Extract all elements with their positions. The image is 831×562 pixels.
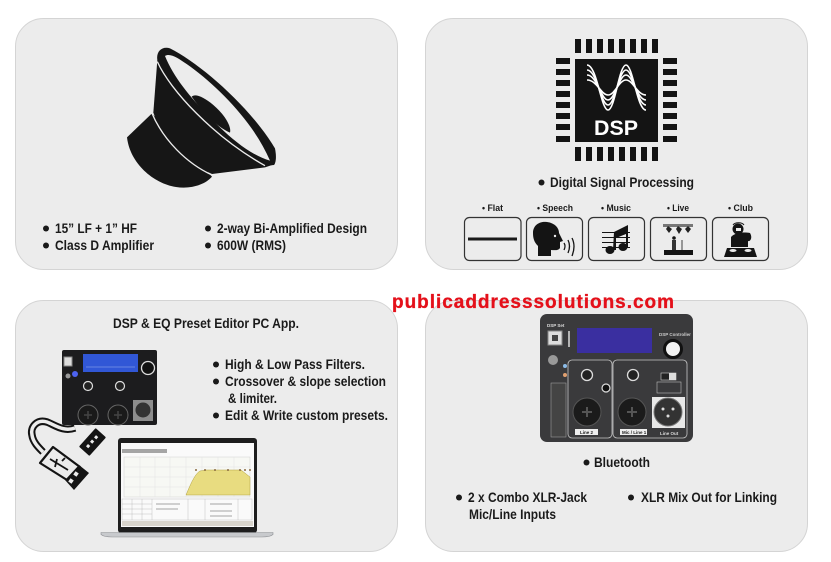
bullets: speaker features right: [205, 220, 367, 253]
EQ chart: [124, 457, 251, 497]
device: rear connector panel: Mic / Line 1: [622, 430, 647, 435]
watermark: website: publicaddresssolutions.com: [392, 292, 674, 313]
heading: Digital Signal Processing: Digital Signal Processing: [550, 174, 694, 190]
preset: Club: • Club: [728, 203, 753, 213]
panel: rear connectors: [426, 300, 808, 552]
bullets: editor features: Crossover & slope selection: [225, 373, 386, 389]
preset: Speech: [526, 203, 582, 260]
panel: DSP: [426, 18, 808, 270]
bullets: XLR mix out: XLR Mix Out for Linking: [641, 489, 777, 505]
bullets: speaker features right: 2-way Bi-Amplified Design: [217, 220, 367, 236]
bullets: speaker features left: [43, 220, 154, 253]
heading: editor title: DSP & EQ Preset Editor PC App.: [113, 315, 299, 331]
device: rear connector panel: Line Out: [660, 431, 679, 436]
bullets: inputs: Mic/Line Inputs: [469, 506, 556, 522]
device: rear connector panel: [540, 314, 693, 442]
preset: Music: • Music: [601, 203, 631, 213]
icon: loudspeaker: [127, 48, 276, 188]
preset: Flat: • Flat: [482, 203, 503, 213]
bullets: speaker features right: 600W (RMS): [217, 237, 286, 253]
panel: DSP and EQ editor: [16, 300, 398, 552]
bullets: speaker features left: Class D Amplifier: [55, 237, 154, 253]
preset: Club: [712, 203, 768, 260]
device: rear connector panel: Line 2: [580, 430, 594, 435]
bullets: editor features: [213, 356, 388, 423]
preset: Live: • Live: [667, 203, 689, 213]
device: rear connector panel: DSP Set: [547, 323, 565, 328]
device: rear connector panel: DSP Controller: [659, 332, 691, 337]
preset: Flat: [464, 203, 521, 260]
bullets: editor features: High & Low Pass Filters.: [225, 356, 365, 372]
icon: DSP chip: [556, 39, 677, 161]
bullets: speaker features left: 15” LF + 1” HF: [55, 220, 137, 236]
laptop with EQ software: [101, 438, 273, 537]
icon: USB cable and plug: [32, 421, 106, 490]
device: rear control panel: [62, 350, 157, 425]
icon: DSP chip: DSP: [594, 117, 638, 140]
bullets: inputs: [456, 489, 587, 522]
preset: Live: [650, 203, 706, 260]
bullets: editor features: & limiter.: [228, 390, 277, 406]
preset: Music: [588, 203, 644, 260]
panel: speaker: [16, 18, 398, 270]
bullets: inputs: 2 x Combo XLR-Jack: [468, 489, 587, 505]
preset: Speech: • Speech: [537, 203, 573, 213]
bullets: editor features: Edit & Write custom presets.: [225, 407, 388, 423]
text: Bluetooth: Bluetooth: [594, 454, 650, 470]
